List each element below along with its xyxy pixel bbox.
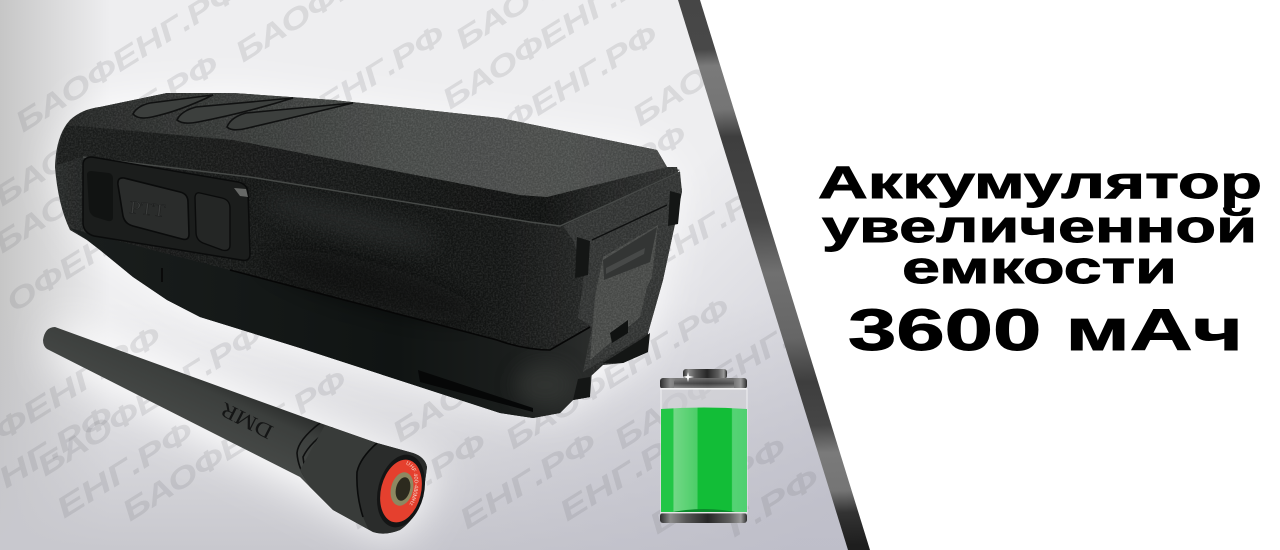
watermark: repeated БАОФЕНГ.РФ: БАОФЕНГ.РФ [428, 19, 664, 183]
battery glass [661, 389, 747, 513]
PTT button [118, 178, 189, 239]
radio lower section [70, 228, 592, 418]
diagonal dark stripe [678, 0, 870, 550]
antenna grooves [297, 423, 333, 483]
watermark: repeated БАОФЕНГ.РФ: ЕНГ.РФ [51, 415, 200, 525]
connector inner [393, 476, 413, 502]
icon: battery [660, 369, 747, 523]
capacity value: 3600 мАч [848, 298, 1243, 363]
left side button [87, 171, 113, 221]
watermark: repeated БАОФЕНГ.РФ: ЕНГ.РФ [554, 418, 703, 528]
latch slit [603, 227, 657, 280]
button panel [83, 157, 250, 260]
heading line 3: емкости [902, 242, 1177, 293]
antenna black rim [370, 450, 432, 532]
battery terminal [683, 369, 727, 379]
watermark: repeated БАОФЕНГ.РФ: БАОФЕНГ.РФ [609, 292, 845, 456]
latch side blocks and feet [573, 191, 681, 400]
charge bottom shade [668, 509, 740, 513]
PTT button: PTT [129, 197, 166, 221]
illustration: antenna [43, 327, 427, 534]
battery end face [563, 172, 682, 372]
top panel [67, 93, 667, 197]
watermark: repeated БАОФЕНГ.РФ: БАОФЕНГ.РФ [547, 172, 783, 336]
watermark: repeated БАОФЕНГ.РФ: БАОФЕНГ.РФ [215, 19, 451, 183]
base rim [660, 512, 747, 513]
panel corner highlight [234, 188, 248, 197]
watermark: repeated БАОФЕНГ.РФ: БАОФЕНГ.РФ [32, 319, 268, 483]
antenna body [43, 327, 427, 534]
illustration: radio body [55, 93, 682, 418]
battery base [660, 513, 747, 523]
radio shading [272, 198, 568, 404]
watermark: repeated БАОФЕНГ.РФ: БАОФЕНГ.РФ [117, 364, 353, 528]
front bevel band [57, 125, 680, 226]
collar rim [660, 388, 747, 390]
antenna cap [358, 443, 427, 534]
watermark: repeated БАОФЕНГ.РФ: ЕНГ.РФ [644, 431, 793, 541]
small body notch [161, 268, 163, 282]
heading line 2: увеличенной [822, 201, 1257, 252]
watermark: repeated БАОФЕНГ.РФ: БАОФЕНГ.РФ [387, 285, 623, 449]
battery charge [661, 408, 747, 513]
watermark: repeated БАОФЕНГ.РФ: ЕНГ.РФ [454, 426, 603, 536]
watermark: repeated БАОФЕНГ.РФ: БАОФЕНГ.РФ [457, 119, 693, 283]
back plate edge [592, 205, 667, 240]
right side button [195, 193, 230, 250]
collar inner cap [674, 378, 734, 389]
watermark: repeated БАОФЕНГ.РФ: БАОФЕНГ.РФ [500, 292, 736, 456]
latch recess [590, 225, 658, 360]
ring label: UHF 400-480MHz [406, 461, 418, 506]
latch notch [610, 320, 628, 343]
speaker ribs [133, 95, 353, 130]
antenna cap seam [357, 443, 377, 517]
connector hole [387, 470, 417, 508]
watermark: repeated БАОФЕНГ.РФ: ЕНГ.РФ [344, 426, 493, 536]
panel: grey product background [0, 0, 863, 550]
watermark: repeated БАОФЕНГ.РФ: БАОФЕНГ.РФ [10, 0, 246, 139]
battery collar [660, 378, 747, 389]
radio silhouette [55, 93, 682, 418]
DMR label: DMR [216, 397, 277, 444]
watermark: repeated БАОФЕНГ.РФ: БАОФЕНГ.РФ [627, 0, 863, 133]
antenna mid collar [300, 425, 377, 540]
antenna red ring [374, 455, 428, 527]
watermark: repeated БАОФЕНГ.РФ: Г.РФ [721, 462, 826, 544]
watermark: repeated БАОФЕНГ.РФ: ОФЕНГ.РФ [1, 182, 193, 319]
heading [818, 157, 1262, 363]
watermark: repeated БАОФЕНГ.РФ [0, 0, 863, 544]
seam line [230, 270, 590, 350]
ridge highlight [83, 157, 680, 226]
lower vent slot [418, 370, 533, 412]
sparkle [682, 372, 694, 382]
heading line 1: Аккумулятор [818, 157, 1262, 208]
